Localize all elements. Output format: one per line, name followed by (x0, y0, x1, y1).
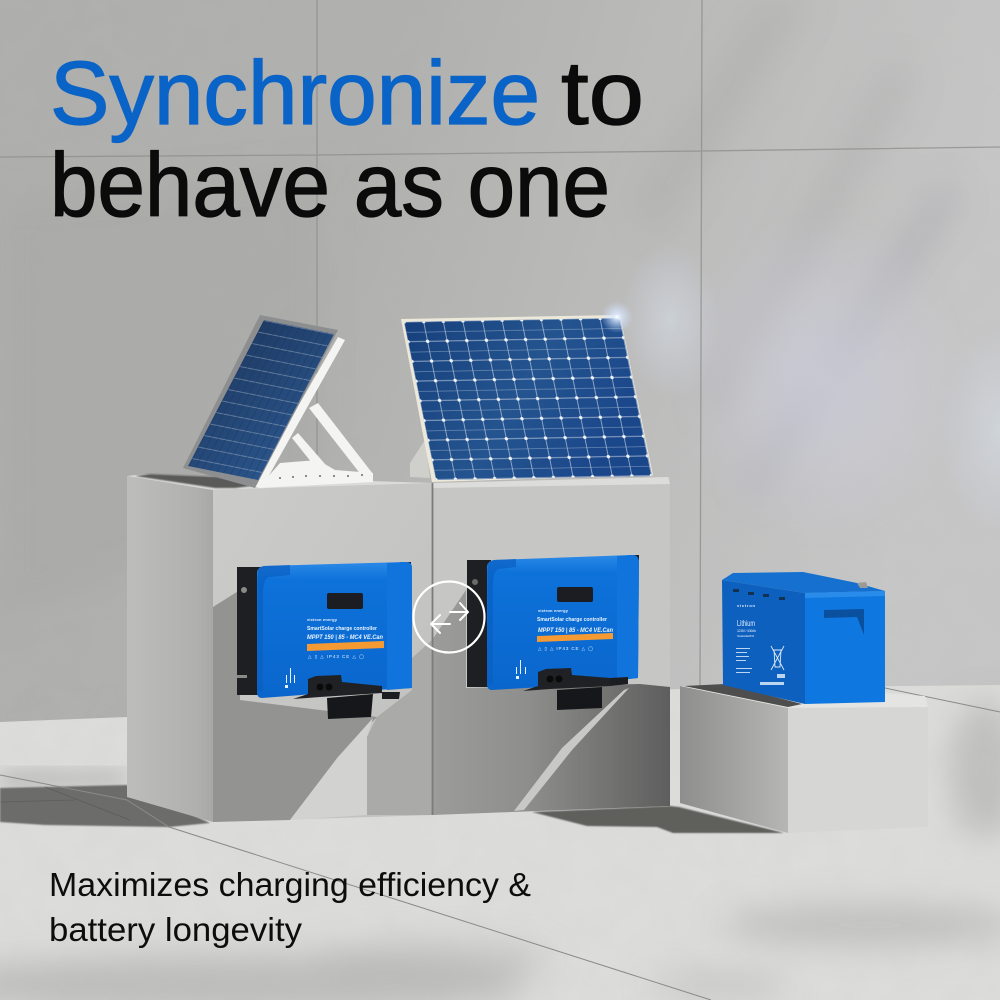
right charge controller: MPPT 150 | 85 - MC4 VE.Can (538, 627, 613, 634)
icon: right solar panel (401, 301, 653, 482)
recycling bin mark (771, 646, 784, 670)
left charge controller: SmartSolar charge controller (307, 626, 378, 632)
icon: lithium battery: 12.8V / 100Ah (737, 629, 756, 633)
right concrete block (432, 477, 670, 815)
icon: lithium battery: victron (737, 603, 756, 608)
icon: sync arrows in circle (414, 582, 484, 652)
subtitle text: battery longevity (49, 911, 303, 948)
left charge controller: victron energy (307, 617, 338, 622)
stand struts and base (252, 337, 373, 488)
right charge controller: victron energy (538, 608, 569, 613)
icon: left solar panel on stand (183, 315, 373, 488)
pavement floor (0, 685, 1000, 1000)
left charge controller: △ ▯ △ IP43 CE △ ◯ (308, 654, 365, 660)
right charge controller (467, 555, 639, 710)
left concrete block (127, 474, 432, 822)
title: to (561, 44, 644, 144)
icon: lithium battery (722, 572, 885, 704)
concrete wall background (0, 0, 1000, 725)
subtitle text (49, 866, 531, 948)
battery and PV connectors (523, 668, 628, 710)
battery concrete block (680, 684, 928, 833)
icon: lithium battery: Lithium (737, 619, 755, 628)
right charge controller: △ ▯ △ IP43 CE △ ◯ (538, 646, 594, 652)
title (50, 44, 644, 236)
title: behave as one (50, 136, 610, 236)
subtitle text: Maximizes charging efficiency & (49, 866, 531, 903)
icon: lithium battery: Smart LiFePO4 (737, 634, 754, 638)
battery and PV connectors (293, 675, 400, 719)
connection ring linking the two controllers (350, 520, 546, 716)
mounting bracket (467, 555, 639, 687)
title: Synchronize (50, 44, 540, 144)
mounting bracket (237, 562, 411, 695)
left charge controller (237, 562, 412, 719)
left charge controller: MPPT 150 | 85 - MC4 VE.Can (307, 634, 383, 641)
right charge controller: SmartSolar charge controller (537, 617, 608, 623)
